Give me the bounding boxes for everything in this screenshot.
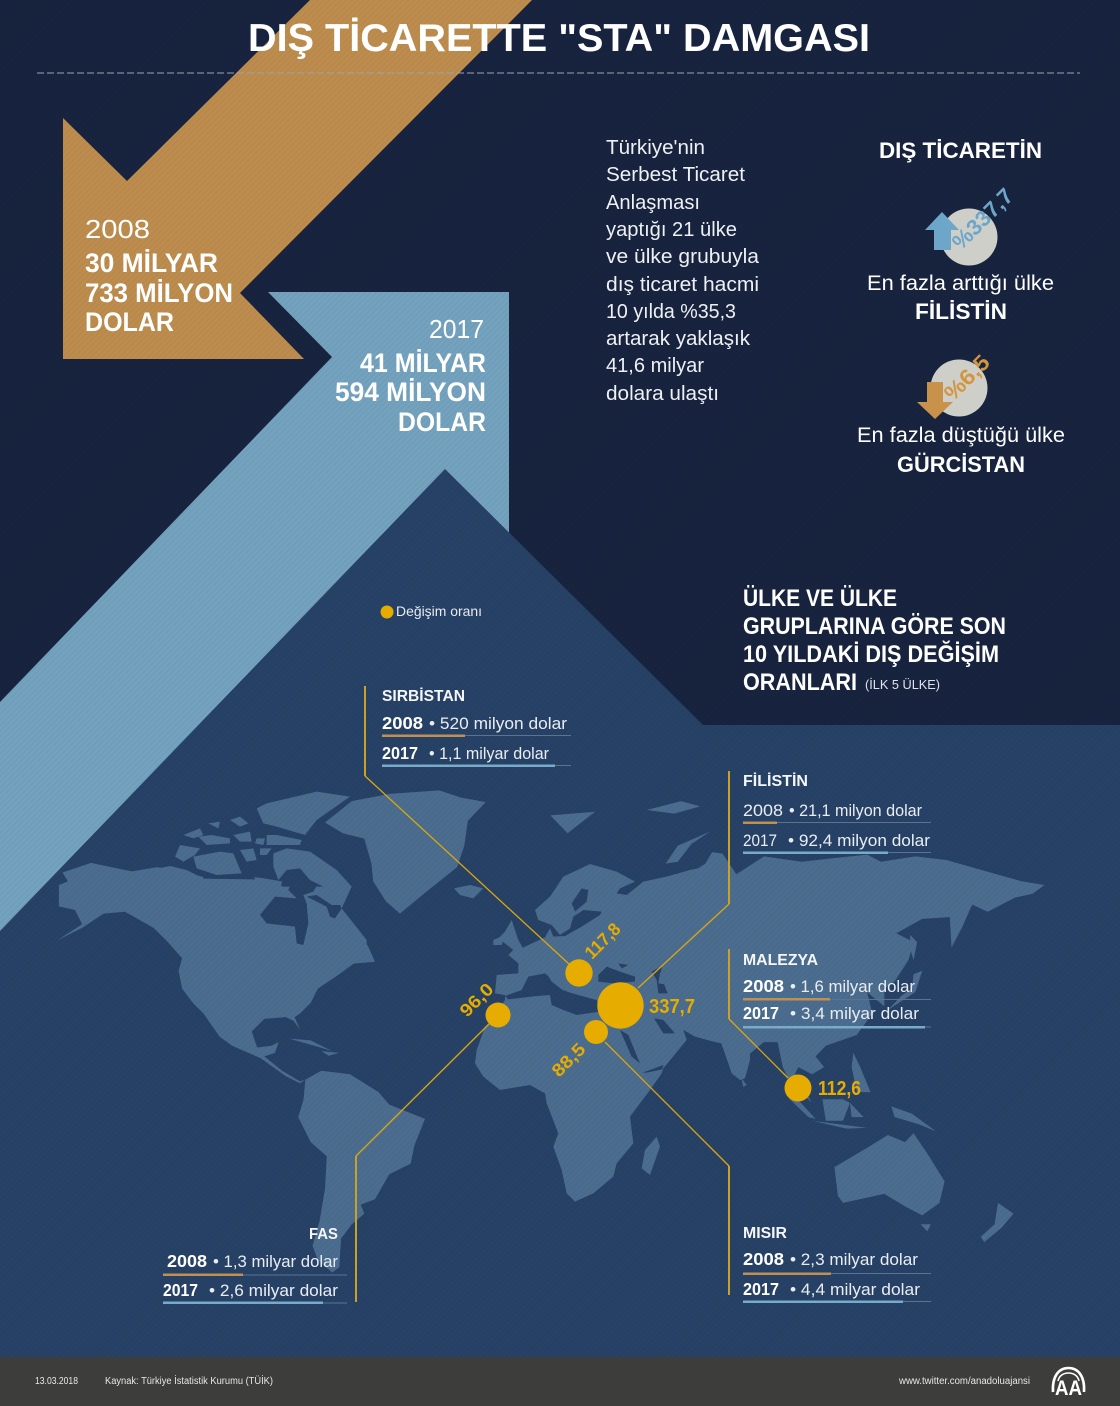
callout: Sırbistan: 2017	[382, 743, 418, 763]
callout: Fas: • 2,6 milyar dolar	[209, 1281, 338, 1300]
bubble: Sırbistan 117,8: 117,8	[581, 919, 625, 963]
map heading: ORANLARI	[743, 669, 857, 696]
callout: Mısır: • 2,3 milyar dolar	[790, 1250, 918, 1269]
bubble: Fas 96,0: 96,0	[456, 979, 497, 1021]
callout: Filistin: • 92,4 milyon dolar	[788, 831, 930, 850]
footer source: Kaynak: Türkiye İstatistik Kurumu (TÜİK)	[105, 1374, 273, 1387]
callout: Sırbistan: • 520 milyon dolar	[429, 714, 567, 733]
callout: Fas: 2008	[167, 1251, 207, 1271]
highest fall country: GÜRCİSTAN	[897, 452, 1025, 477]
map heading: 10 YILDAKİ DIŞ DEĞİŞİM	[743, 640, 999, 668]
highest fall country	[857, 424, 1065, 477]
2008 value: 733 MİLYON	[85, 278, 233, 308]
callout: Filistin: 2008	[743, 801, 783, 820]
intro paragraph: Türkiye'nin	[606, 137, 705, 159]
bubble: Sırbistan 117,8	[565, 919, 625, 987]
intro paragraph: 41,6 milyar	[606, 355, 704, 377]
foreign trade heading: DIŞ TİCARETİN	[879, 138, 1042, 163]
callout: Mısır: 2008	[743, 1249, 784, 1269]
intro paragraph: Serbest Ticaret	[606, 164, 745, 186]
intro paragraph: yaptığı 21 ülke	[606, 219, 737, 241]
2008 value: 30 MİLYAR	[85, 248, 218, 278]
callout: Filistin: 2017	[743, 831, 777, 850]
world map	[57, 790, 1044, 1272]
icon: rise circle with up arrow: %337,7	[947, 183, 1018, 255]
callout: Mısır: MISIR	[743, 1225, 787, 1242]
callout: Malezya: • 1,6 milyar dolar	[790, 977, 915, 996]
callout: Malezya: • 3,4 milyar dolar	[790, 1004, 919, 1023]
intro paragraph: ve ülke grubuyla	[606, 246, 760, 268]
callout: Sırbistan: • 1,1 milyar dolar	[429, 744, 549, 763]
2008 value: 2008	[85, 214, 150, 244]
callout: Mısır: 2017	[743, 1279, 779, 1299]
callout: Sırbistan: 2008	[382, 713, 423, 733]
callout: Filistin: • 21,1 milyon dolar	[789, 801, 922, 820]
map heading: (İLK 5 ÜLKE)	[865, 677, 940, 692]
map heading: ÜLKE VE ÜLKE	[743, 585, 897, 612]
icon: AA logo	[1053, 1368, 1084, 1400]
2017 value: DOLAR	[398, 407, 486, 437]
callout: Malezya: 2008	[743, 976, 784, 996]
bubble: Malezya 112,6: 112,6	[818, 1078, 861, 1100]
callout: Malezya	[729, 949, 931, 1078]
icon: fall circle with down arrow: %6,5	[939, 350, 995, 406]
callout: Mısır: • 4,4 milyar dolar	[790, 1280, 920, 1299]
bubble: Fas 96,0	[456, 979, 510, 1028]
2008 value: DOLAR	[85, 307, 174, 337]
footer link: www.twitter.com/anadoluajansi	[898, 1376, 1030, 1387]
intro paragraph: 10 yılda %35,3	[606, 301, 736, 323]
title: DIŞ TİCARETTE "STA" DAMGASI	[248, 17, 870, 60]
callout: Fas	[163, 1024, 489, 1304]
map panel background	[0, 469, 1120, 1357]
highest fall country: En fazla düştüğü ülke	[857, 424, 1065, 447]
map heading	[743, 585, 1006, 696]
icon: AA logo: AA	[1055, 1377, 1082, 1400]
highest rise country: FİLİSTİN	[915, 299, 1007, 324]
icon: rise circle with up arrow	[925, 183, 1018, 266]
callout: Malezya: 2017	[743, 1003, 779, 1023]
bubble: Malezya 112,6	[784, 1074, 861, 1102]
callout: Sırbistan: SIRBİSTAN	[382, 687, 465, 705]
intro paragraph: artarak yaklaşık	[606, 328, 751, 350]
2008 value	[85, 214, 233, 337]
callout: Malezya: MALEZYA	[743, 952, 818, 969]
light blue arrow 2017	[0, 292, 509, 960]
bubble: Filistin 337,7	[597, 982, 695, 1029]
callout: Filistin	[638, 771, 931, 988]
callout: Fas: 2017	[163, 1280, 198, 1300]
map heading: GRUPLARINA GÖRE SON	[743, 613, 1006, 640]
intro paragraph	[606, 137, 760, 405]
2017 value: 2017	[429, 314, 484, 344]
legend: Değişim oranı	[396, 603, 482, 619]
gold arrow 2008	[63, 0, 532, 359]
bubble: Filistin 337,7: 337,7	[649, 996, 695, 1018]
callout: Sırbistan	[365, 686, 571, 964]
icon: fall circle with down arrow	[917, 350, 995, 419]
footer bar	[0, 1357, 1120, 1406]
intro paragraph: dış ticaret hacmi	[606, 274, 759, 296]
highest rise country	[867, 272, 1054, 324]
2017 value: 594 MİLYON	[335, 377, 486, 407]
2017 value	[335, 314, 486, 437]
bubble: Mısır 88,5: 88,5	[548, 1039, 589, 1081]
2017 value: 41 MİLYAR	[360, 348, 486, 378]
intro paragraph: Anlaşması	[606, 192, 700, 214]
callout: Filistin: FİLİSTİN	[743, 772, 808, 790]
intro paragraph: dolara ulaştı	[606, 383, 719, 405]
callout: Fas: FAS	[309, 1226, 338, 1243]
callout: Mısır	[605, 1042, 931, 1303]
callout: Fas: • 1,3 milyar dolar	[213, 1252, 338, 1271]
footer date: 13.03.2018	[35, 1376, 78, 1387]
highest rise country: En fazla arttığı ülke	[867, 272, 1054, 295]
bubble: Mısır 88,5	[548, 1020, 608, 1081]
